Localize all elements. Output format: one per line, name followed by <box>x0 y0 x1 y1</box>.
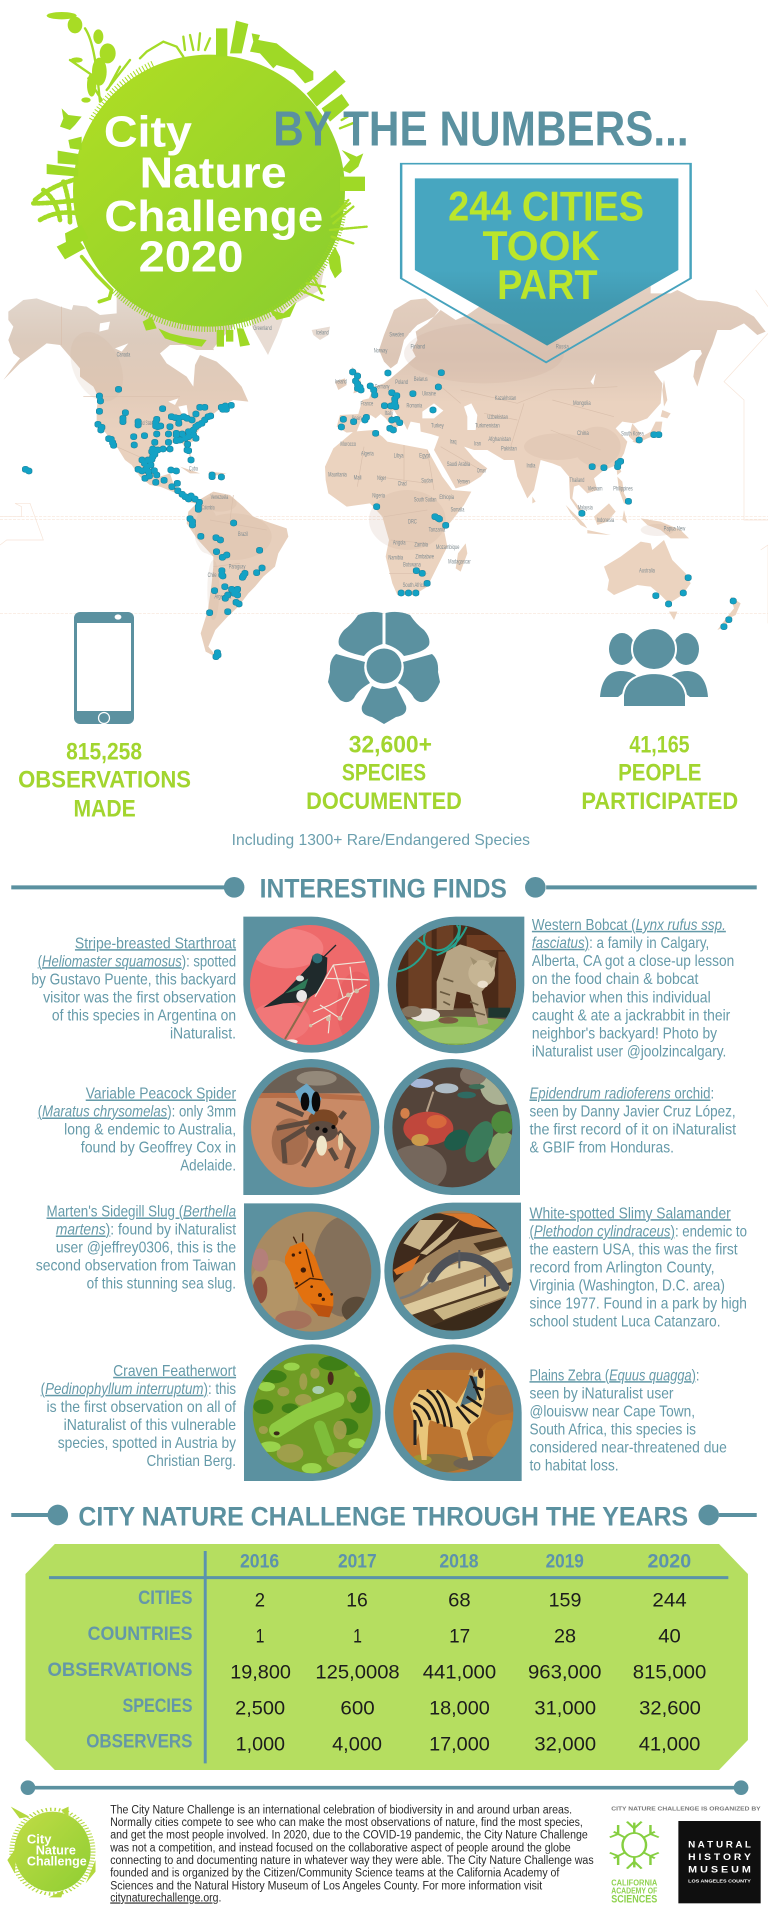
footer <box>7 1780 761 1906</box>
landmasses: Eurasia, Africa and Oceania <box>325 277 766 630</box>
logo wording: Nature <box>140 148 287 197</box>
logo: California Academy of Sciences <box>610 1822 659 1906</box>
map labels: Libya <box>394 452 404 459</box>
map labels: South Africa <box>403 581 426 589</box>
map labels: Nigeria <box>372 492 385 499</box>
icon: small City Nature Challenge logo <box>7 1807 96 1897</box>
map labels: Niger <box>377 474 386 482</box>
map labels: Uzbekistan <box>487 413 508 421</box>
text: starthroat: visitor was the first observation <box>43 990 236 1006</box>
map labels: Ukraine <box>422 390 436 397</box>
map labels: Turkmenistan <box>475 422 500 429</box>
stat: observations <box>18 612 191 822</box>
text: featherwort: Craven Featherwort <box>113 1363 237 1380</box>
text: peacock spider <box>38 1086 236 1175</box>
table values: 68 <box>448 1590 471 1611</box>
map labels: Iran <box>474 440 481 447</box>
text: starthroat: (Heliomaster squamosus): spotted <box>38 954 236 970</box>
table values: 17,000 <box>429 1734 490 1755</box>
stat: people <box>581 628 738 815</box>
table values: 18,000 <box>429 1698 490 1719</box>
map labels: Sudan <box>421 477 433 484</box>
year headers <box>240 1551 691 1572</box>
text: featherwort: Christian Berg. <box>146 1453 236 1470</box>
map labels: Saudi Arabia <box>447 460 471 468</box>
table values: 1 <box>353 1626 362 1647</box>
observations text: 815,258 <box>66 739 142 765</box>
map labels: Mongolia <box>573 399 591 407</box>
text: peacock spider: Adelaide. <box>180 1158 236 1175</box>
map labels: Somalia <box>451 506 465 513</box>
icon: small City Nature Challenge logo: City <box>27 1831 52 1847</box>
map labels: Angola <box>393 539 406 546</box>
map labels: India <box>527 462 536 469</box>
map labels: Cuba <box>189 465 198 472</box>
map labels <box>117 324 686 600</box>
icon: group of people <box>600 628 708 707</box>
globe disc with city blocks and wildlife <box>33 12 367 347</box>
map labels: Mali <box>354 474 362 481</box>
text: starthroat: by Gustavo Puente, this backyard <box>31 972 236 988</box>
map labels: Spain <box>352 414 361 422</box>
text: peacock spider: found by Geoffrey Cox in <box>81 1140 236 1157</box>
map labels: Finland <box>410 343 425 350</box>
table values: 32,000 <box>534 1734 596 1755</box>
map labels: Russia <box>556 343 569 350</box>
callout: 244 cities took part: PART <box>497 262 598 309</box>
map labels: Zimbabwe <box>415 553 434 560</box>
table values: 600 <box>340 1698 375 1719</box>
observations text: OBSERVATIONS <box>18 767 191 793</box>
map labels: Madagascar <box>448 558 471 565</box>
logo: Natural History Museum: H I S T O R Y <box>688 1853 751 1862</box>
species text: SPECIES <box>342 760 426 786</box>
map labels: Belarus <box>414 375 428 383</box>
map labels: Oman <box>477 467 486 474</box>
row labels: COUNTRIES <box>88 1623 192 1645</box>
text: sidegill slug: Marten's Sidegill Slug (Berthella <box>47 1204 236 1221</box>
world map with city markers <box>0 250 768 658</box>
map labels: China <box>577 429 589 437</box>
table values: 1,000 <box>236 1734 285 1755</box>
map labels: Venezuela <box>211 493 229 501</box>
map labels: Ireland <box>335 378 347 385</box>
map labels: Algeria <box>361 450 374 457</box>
text: orchid <box>529 1086 737 1157</box>
map labels: Tanzania <box>429 526 446 533</box>
table values: 159 <box>549 1590 581 1611</box>
text: sidegill slug: user @jeffrey0306, this is the <box>56 1240 236 1257</box>
map labels: Afghanistan <box>488 435 511 443</box>
text: featherwort: (Pedinophyllum interruptum): this <box>41 1381 236 1398</box>
map labels: Argentina <box>215 593 232 600</box>
map labels: Thailand <box>570 476 584 484</box>
row labels <box>48 1587 192 1752</box>
table values: 19,800 <box>230 1662 291 1683</box>
map labels: Romania <box>407 402 423 409</box>
table values: 40 <box>658 1626 681 1647</box>
map labels: Iraq <box>450 438 456 445</box>
map labels: Mauritania <box>328 471 347 478</box>
heading: Interesting Finds: INTERESTING FINDS <box>260 874 507 904</box>
table values: 32,600 <box>639 1698 701 1719</box>
icon: small City Nature Challenge logo: Challenge <box>27 1854 87 1869</box>
logo: Natural History Museum <box>678 1821 761 1903</box>
table values <box>230 1590 706 1755</box>
photo: featherwort <box>244 1344 381 1481</box>
map labels: South Korea <box>621 430 644 437</box>
map labels: Egypt <box>419 452 431 459</box>
photo: starthroat <box>243 917 379 1053</box>
map labels: Turkey <box>431 422 444 429</box>
table values: 125,0008 <box>315 1662 400 1683</box>
table values: 31,000 <box>534 1698 596 1719</box>
table values: 17 <box>449 1626 470 1647</box>
text: featherwort: is the first observation on all of <box>47 1399 237 1416</box>
table values: 41,000 <box>639 1734 700 1755</box>
map labels: United States <box>135 419 155 427</box>
observations text <box>18 739 191 822</box>
panel: interesting finds photos <box>243 917 527 1481</box>
table values: 28 <box>554 1626 576 1647</box>
text: starthroat: Stripe-breasted Starthroat <box>75 936 237 952</box>
map labels: Yemen <box>457 478 470 485</box>
map labels: Botswana <box>403 561 421 568</box>
table: challenge through the years <box>25 1544 748 1770</box>
text: sidegill slug: of this stunning sea slug. <box>87 1276 236 1293</box>
text: zebra: Plains Zebra (Equus quagga): <box>529 1368 699 1384</box>
table values: 2,500 <box>235 1698 285 1719</box>
text: sidegill slug <box>36 1204 237 1293</box>
stat: species <box>232 612 530 849</box>
table values: 2 <box>255 1590 265 1611</box>
table values: 4,000 <box>332 1734 382 1755</box>
text: featherwort: species, spotted in Austria by <box>58 1435 236 1452</box>
map labels: Chile <box>208 571 216 579</box>
logo: California Academy of Sciences: CALIFORNIA <box>611 1878 657 1888</box>
people text: 41,165 <box>629 732 690 758</box>
text: salamander <box>529 1206 747 1331</box>
table values: 1 <box>256 1626 264 1647</box>
photo: orchid <box>384 1059 520 1195</box>
people text <box>581 732 738 815</box>
icon: smartphone <box>74 612 134 724</box>
heading: Interesting Finds <box>11 874 757 904</box>
species text <box>306 732 462 815</box>
map labels: Chad <box>398 480 407 487</box>
people text: PEOPLE <box>618 760 701 786</box>
map labels: Morocco <box>340 440 356 448</box>
about paragraph: citynaturechallenge.org. <box>110 1892 221 1905</box>
map labels: Mozambique <box>436 543 459 551</box>
logo wording: 2020 <box>139 232 243 281</box>
table values: 963,000 <box>528 1662 601 1683</box>
year headers: 2020 <box>648 1551 691 1572</box>
map labels: Kazakhstan <box>495 394 516 402</box>
row labels: OBSERVERS <box>86 1731 192 1752</box>
logo: Natural History Museum: LOS ANGELES COUNTY <box>688 1879 751 1884</box>
map labels: Namibia <box>388 554 404 561</box>
text: peacock spider: long & endemic to Australia, <box>64 1122 236 1139</box>
logo wording <box>104 107 323 281</box>
city markers <box>25 371 733 658</box>
photo: sidegill slug <box>244 1203 381 1340</box>
table values: 815,000 <box>633 1662 706 1683</box>
row labels: CITIES <box>138 1587 192 1609</box>
map labels: Poland <box>395 378 408 386</box>
species text: 32,600+ <box>349 732 432 758</box>
map labels: Canada <box>117 351 131 358</box>
text: featherwort <box>41 1363 237 1470</box>
map labels: Italy <box>384 409 393 417</box>
text: peacock spider: (Maratus chrysomelas): only 3mm <box>38 1104 236 1121</box>
text: starthroat <box>31 936 237 1042</box>
text: starthroat: iNaturalist. <box>170 1026 236 1042</box>
observations text: MADE <box>73 796 136 822</box>
text: sidegill slug: second observation from Taiwan <box>36 1258 236 1275</box>
text: orchid: Epidendrum radioferens orchid: <box>529 1086 714 1103</box>
map labels: Zambia <box>414 541 429 548</box>
text: zebra <box>529 1368 727 1474</box>
map labels: Brazil <box>238 530 248 538</box>
text: zebra: seen by iNaturalist user <box>529 1386 674 1402</box>
text: orchid: & GBIF from Honduras. <box>529 1140 674 1157</box>
map labels: Greenland <box>253 324 272 332</box>
photo: peacock spider <box>243 1059 379 1195</box>
world map with city markers: Papua New <box>664 525 686 532</box>
callout: 244 cities took part: TOOK <box>482 223 600 270</box>
rare species note: Including 1300+ Rare/Endangered Species <box>232 832 530 849</box>
map labels: Colombia <box>202 504 215 511</box>
icon: flower <box>328 612 440 724</box>
logo wording: Challenge <box>104 191 323 241</box>
map labels: Germany <box>375 383 389 390</box>
callout: 244 cities took part: 244 CITIES <box>448 184 644 230</box>
map labels: Iceland <box>316 329 329 336</box>
about paragraph <box>109 1804 594 1905</box>
map labels: Paraguay <box>229 563 246 570</box>
map labels: Pakistan <box>501 445 517 452</box>
row labels: OBSERVATIONS <box>48 1659 192 1681</box>
text: sidegill slug: martens): found by iNaturalist <box>56 1222 237 1239</box>
map labels: DRC <box>408 518 417 525</box>
logo: California Academy of Sciences: ACADEMY OF <box>611 1886 658 1896</box>
map labels: South Sudan <box>414 496 436 503</box>
year headers: 2016 <box>240 1551 279 1572</box>
landmasses: Americas <box>3 250 330 658</box>
logo: City Nature Challenge 2020 globe <box>33 12 367 347</box>
photo: salamander <box>384 1203 521 1339</box>
callout: 244 cities took part <box>401 164 691 362</box>
map labels: Sweden <box>389 331 404 338</box>
map labels: Vietnam <box>588 485 602 492</box>
logo wording: City <box>104 107 192 156</box>
text: peacock spider: Variable Peacock Spider <box>86 1086 236 1103</box>
row labels: SPECIES <box>122 1695 192 1717</box>
text: starthroat: of this species in Argentina on <box>52 1008 236 1024</box>
map labels: Philippines <box>613 485 633 492</box>
map labels: Norway <box>374 347 388 354</box>
table values: 441,000 <box>423 1662 496 1683</box>
species text: DOCUMENTED <box>306 788 462 815</box>
text: bobcat <box>532 917 734 1060</box>
text: featherwort: iNaturalist of this vulnerable <box>64 1417 236 1434</box>
photo: zebra <box>385 1344 527 1481</box>
map labels: Australia <box>639 567 655 574</box>
text: zebra: to habitat loss. <box>529 1458 619 1474</box>
year headers: 2018 <box>439 1551 479 1572</box>
logo: California Academy of Sciences: SCIENCES <box>611 1893 657 1906</box>
map graticule <box>0 290 768 623</box>
photo: bobcat <box>388 917 524 1053</box>
table values: 244 <box>652 1590 687 1611</box>
map labels: Indonesia <box>597 516 615 524</box>
logo: Natural History Museum: M U S E U M <box>688 1865 751 1875</box>
map labels: Ethiopia <box>439 493 454 501</box>
table values: 16 <box>346 1590 368 1611</box>
map labels: Malaysia <box>578 504 593 511</box>
year headers: 2019 <box>546 1551 584 1572</box>
map labels: France <box>360 400 373 407</box>
year headers: 2017 <box>338 1551 377 1572</box>
icon: small City Nature Challenge logo: Nature <box>36 1842 76 1858</box>
